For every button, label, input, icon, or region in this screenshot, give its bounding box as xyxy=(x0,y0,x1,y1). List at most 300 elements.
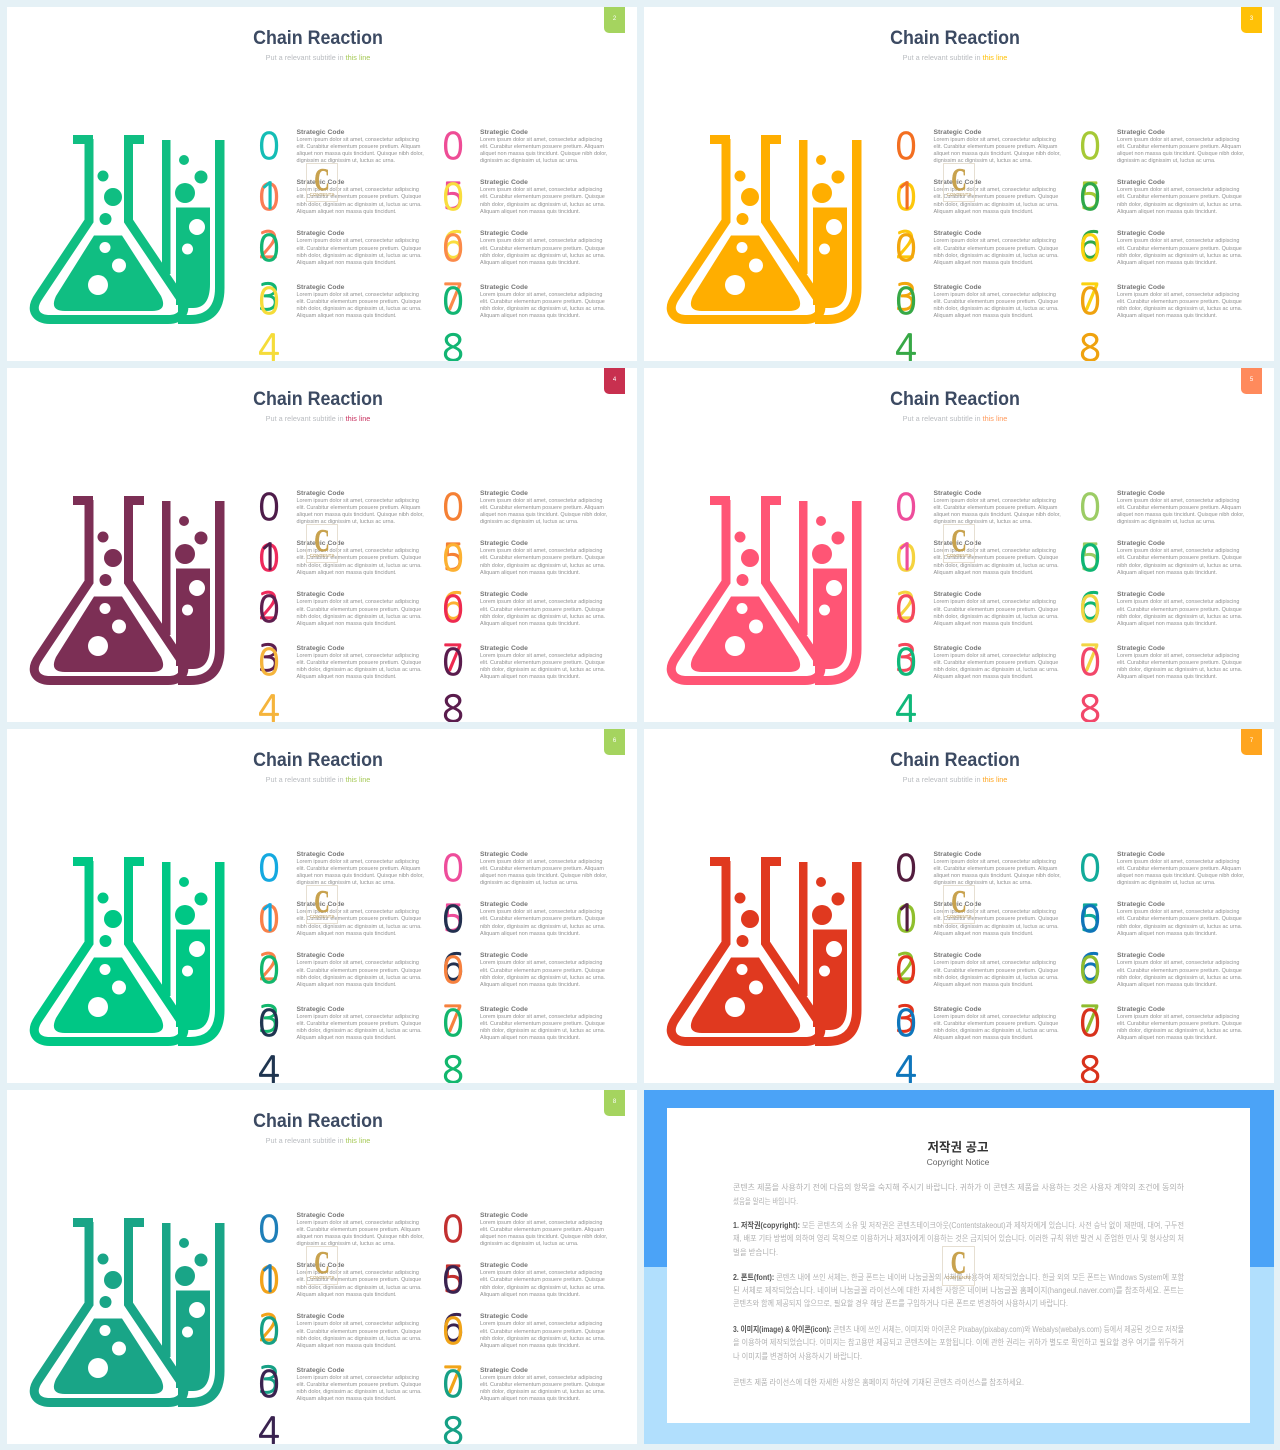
text block xyxy=(934,490,1061,527)
text block: nibh dolor, dignissim ac dignissim ut, luctus ac urna. xyxy=(934,924,1059,930)
numerals right column: 6 xyxy=(1079,228,1101,264)
page tag xyxy=(604,1090,625,1116)
text block: elit. Curabitur elementum posuere pretium. Quisque xyxy=(480,246,605,252)
text block: elit. Curabitur elementum posuere pretium. Aliquam xyxy=(1117,505,1241,511)
text block xyxy=(934,645,1059,682)
notice intro: 콘텐츠 제품을 사용하기 전에 다음의 항목을 숙지해 주시기 바랍니다. 귀하가 이 콘텐츠 제품을 사용하는 것은 사용자 계약의 조건에 동의하 xyxy=(733,1182,1185,1192)
text block xyxy=(296,1367,422,1404)
text block: dignissim ac dignissim ut, luctus ac urna. xyxy=(480,880,579,886)
text block xyxy=(1117,129,1244,164)
numerals left column: 2 xyxy=(258,950,279,986)
section 1 copyright: 재, 배포 기타 방법에 의하여 영리 목적으로 이용하거나 제3자에게 이용하는 것은 금지되어 있습니다. 이러한 규칙 위반 발견 시 준엄한 민사 및 형사상의 처 xyxy=(733,1233,1184,1243)
numerals left column: 3 xyxy=(258,1363,279,1399)
text block: nibh dolor, dignissim ac dignissim ut, luctus ac urna. xyxy=(480,306,605,312)
text block: Strategic Code xyxy=(480,1367,528,1374)
text block: elit. Curabitur elementum posuere pretium. Quisque xyxy=(934,246,1058,252)
text block: Strategic Code xyxy=(296,1212,344,1219)
numerals left column: 0 xyxy=(258,180,279,216)
text block: aliquet non massa quis tincidunt. Quisque nibh dolor, xyxy=(934,873,1061,879)
text block: Strategic Code xyxy=(1117,230,1165,237)
text block: nibh dolor, dignissim ac dignissim ut, luctus ac urna. xyxy=(296,1389,422,1395)
numerals right column: 0 xyxy=(442,902,464,938)
text block: elit. Curabitur elementum posuere pretium. Quisque xyxy=(296,968,421,974)
title: Chain Reaction xyxy=(253,1110,383,1132)
text block: nibh dolor, dignissim ac dignissim ut, luctus ac urna. xyxy=(934,202,1059,208)
text block: Aliquam aliquet non massa quis tincidunt. xyxy=(1117,931,1217,937)
text block: nibh dolor, dignissim ac dignissim ut, luctus ac urna. xyxy=(296,614,422,620)
text block: Strategic Code xyxy=(480,952,528,959)
numerals right column: 0 xyxy=(442,1367,464,1403)
numerals left column xyxy=(895,490,916,722)
text block: aliquet non massa quis tincidunt. Quisque nibh dolor, xyxy=(480,873,607,879)
title: Chain Reaction xyxy=(253,388,383,410)
numerals right column: 0 xyxy=(1079,851,1101,887)
watermark: CONTENTS xyxy=(310,192,334,197)
text block: Strategic Code xyxy=(1117,284,1165,291)
text block: Strategic Code xyxy=(1117,1006,1165,1013)
text block: Strategic Code xyxy=(296,952,344,959)
text block xyxy=(1117,645,1242,682)
numerals right column: 0 xyxy=(442,1212,464,1248)
text block xyxy=(296,230,422,266)
text block: Aliquam aliquet non massa quis tincidunt. xyxy=(934,674,1034,680)
text block xyxy=(480,230,605,266)
numerals left column: 0 xyxy=(895,490,916,526)
text block xyxy=(934,901,1059,938)
text block: Strategic Code xyxy=(1117,179,1165,186)
numerals left column: 0 xyxy=(895,129,916,165)
text block: Aliquam aliquet non massa quis tincidunt. xyxy=(1117,260,1217,266)
numerals left column: 0 xyxy=(895,645,916,681)
text block xyxy=(480,901,605,938)
text block xyxy=(480,952,605,989)
text block: Aliquam aliquet non massa quis tincidunt. xyxy=(480,1396,580,1402)
text block: nibh dolor, dignissim ac dignissim ut, luctus ac urna. xyxy=(480,202,605,208)
text block: Lorem ipsum dolor sit amet, consectetur adipiscing xyxy=(1117,137,1239,143)
numerals left column: 0 xyxy=(258,490,279,526)
numerals right column: 5 xyxy=(442,1262,464,1298)
numerals left column: 0 xyxy=(258,1314,279,1350)
watermark xyxy=(306,1246,338,1285)
text block: Strategic Code xyxy=(934,851,981,858)
text block: elit. Curabitur elementum posuere pretium. Quisque xyxy=(1117,299,1242,305)
text block: Lorem ipsum dolor sit amet, consectetur adipiscing xyxy=(480,859,602,865)
text block: nibh dolor, dignissim ac dignissim ut, luctus ac urna. xyxy=(934,306,1059,312)
text block: nibh dolor, dignissim ac dignissim ut, luctus ac urna. xyxy=(296,202,422,208)
watermark xyxy=(943,163,975,202)
text block: Aliquam aliquet non massa quis tincidunt. xyxy=(296,313,397,319)
numerals left column xyxy=(254,1090,283,1444)
text block: aliquet non massa quis tincidunt. Quisque nibh dolor, xyxy=(480,1234,607,1240)
title: Chain Reaction xyxy=(890,27,1020,49)
text block: elit. Curabitur elementum posuere pretium. Quisque xyxy=(296,1021,421,1027)
text block xyxy=(934,952,1059,989)
notice subtitle: Copyright Notice xyxy=(927,1157,990,1167)
text block: Lorem ipsum dolor sit amet, consectetur adipiscing xyxy=(296,1014,419,1020)
text block xyxy=(480,1262,605,1299)
watermark: CONTENTS xyxy=(947,553,971,558)
numerals left column: 0 xyxy=(895,231,916,267)
text block: Strategic Code xyxy=(934,591,981,598)
text block xyxy=(934,129,1061,164)
text block: elit. Curabitur elementum posuere pretium. Quisque xyxy=(296,660,421,666)
text block: elit. Curabitur elementum posuere pretium. Quisque xyxy=(480,555,605,561)
text block xyxy=(934,591,1059,628)
numerals right column: 5 xyxy=(442,540,464,576)
text block: Strategic Code xyxy=(296,1313,344,1320)
text block: aliquet non massa quis tincidunt. Quisque nibh dolor, xyxy=(480,151,607,157)
text block: Aliquam aliquet non massa quis tincidunt. xyxy=(296,621,397,627)
numerals left column: 0 xyxy=(258,645,279,681)
text block: nibh dolor, dignissim ac dignissim ut, luctus ac urna. xyxy=(296,1028,422,1034)
text block: Aliquam aliquet non massa quis tincidunt. xyxy=(480,1292,580,1298)
text block: Aliquam aliquet non massa quis tincidunt. xyxy=(296,570,397,576)
text block: Aliquam aliquet non massa quis tincidunt. xyxy=(934,260,1034,266)
text block: nibh dolor, dignissim ac dignissim ut, luctus ac urna. xyxy=(934,562,1059,568)
text block: Lorem ipsum dolor sit amet, consectetur adipiscing xyxy=(296,909,419,915)
panel: slide 8 teal xyxy=(7,1090,637,1444)
text block: nibh dolor, dignissim ac dignissim ut, luctus ac urna. xyxy=(296,667,422,673)
text block: Aliquam aliquet non massa quis tincidunt. xyxy=(480,931,580,937)
watermark xyxy=(306,163,338,202)
numerals right column: 0 xyxy=(1079,1006,1101,1042)
numerals right column xyxy=(442,490,464,722)
numerals left column: 2 xyxy=(895,228,916,264)
text block: nibh dolor, dignissim ac dignissim ut, luctus ac urna. xyxy=(296,253,422,259)
text block: Strategic Code xyxy=(296,1367,344,1374)
text block: elit. Curabitur elementum posuere pretium. Quisque xyxy=(480,607,605,613)
text block: elit. Curabitur elementum posuere pretium. Quisque xyxy=(296,299,421,305)
text block: Aliquam aliquet non massa quis tincidunt. xyxy=(480,621,580,627)
text block: elit. Curabitur elementum posuere pretium. Quisque xyxy=(480,1382,605,1388)
text block: elit. Curabitur elementum posuere pretium. Quisque xyxy=(1117,1021,1242,1027)
panel: slide 7 red xyxy=(644,729,1274,1083)
section 3 image and icon: 나 이미지를 변경하여 사용하시기 바랍니다. xyxy=(733,1351,862,1361)
text block: Lorem ipsum dolor sit amet, consectetur adipiscing xyxy=(480,1270,602,1276)
text block: dignissim ac dignissim ut, luctus ac urna. xyxy=(934,880,1032,886)
text block xyxy=(934,284,1059,319)
text block: elit. Curabitur elementum posuere pretium. Quisque xyxy=(296,246,421,252)
icon: flask and test tube xyxy=(666,496,862,685)
numerals left column: 3 xyxy=(258,1002,279,1038)
text block: nibh dolor, dignissim ac dignissim ut, luctus ac urna. xyxy=(480,614,605,620)
numerals right column: 0 xyxy=(1079,902,1101,938)
text block: elit. Curabitur elementum posuere pretium. Quisque xyxy=(934,299,1058,305)
text block xyxy=(480,490,607,525)
text block: nibh dolor, dignissim ac dignissim ut, luctus ac urna. xyxy=(480,1336,605,1342)
numerals left column: 1 xyxy=(258,901,279,937)
text block: Strategic Code xyxy=(480,591,528,598)
numerals left column: 0 xyxy=(258,902,279,938)
text block xyxy=(296,901,422,938)
text block: aliquet non massa quis tincidunt. Quisque nibh dolor, xyxy=(480,512,607,518)
panel: copyright notice xyxy=(644,1090,1274,1444)
section 1 copyright: 1. 저작권(copyright): 모든 콘텐츠의 소유 및 저작권은 콘텐츠테이크아웃(Contentstakeout)과 제작자에게 있습니다. 사전 승낙 없이 재판매, 대여, 구두전 xyxy=(733,1220,1184,1230)
text block: Aliquam aliquet non massa quis tincidunt. xyxy=(480,570,580,576)
text block: elit. Curabitur elementum posuere pretium. Quisque xyxy=(296,194,421,200)
panel: slide 4 plum xyxy=(7,368,637,722)
text block: nibh dolor, dignissim ac dignissim ut, luctus ac urna. xyxy=(1117,614,1242,620)
text block xyxy=(1117,851,1244,888)
text block: Strategic Code xyxy=(296,540,344,547)
text block: dignissim ac dignissim ut, luctus ac urna. xyxy=(296,880,395,886)
text block: Strategic Code xyxy=(480,179,528,186)
numerals left column: 0 xyxy=(258,953,279,989)
text block: Strategic Code xyxy=(296,901,344,908)
text block: elit. Curabitur elementum posuere pretium. Quisque xyxy=(480,194,605,200)
text block: Strategic Code xyxy=(1117,645,1165,652)
text block: Lorem ipsum dolor sit amet, consectetur adipiscing xyxy=(1117,1014,1239,1020)
numerals left column xyxy=(254,729,283,1083)
text block xyxy=(480,591,605,627)
text block xyxy=(480,1367,605,1404)
text block xyxy=(296,284,422,319)
text block: elit. Curabitur elementum posuere pretium. Quisque xyxy=(296,1277,421,1283)
text block: elit. Curabitur elementum posuere pretium. Quisque xyxy=(480,660,605,666)
text block: elit. Curabitur elementum posuere pretium. Aliquam xyxy=(296,866,420,872)
text block: elit. Curabitur elementum posuere pretium. Quisque xyxy=(934,660,1058,666)
text block: nibh dolor, dignissim ac dignissim ut, luctus ac urna. xyxy=(480,667,605,673)
text block: Lorem ipsum dolor sit amet, consectetur adipiscing xyxy=(480,1321,602,1327)
text block xyxy=(296,129,424,164)
text block: aliquet non massa quis tincidunt. Quisque nibh dolor, xyxy=(1117,512,1244,518)
text block: elit. Curabitur elementum posuere pretium. Aliquam xyxy=(934,505,1057,511)
text block xyxy=(480,540,605,576)
text block: nibh dolor, dignissim ac dignissim ut, luctus ac urna. xyxy=(296,1336,422,1342)
text block: Strategic Code xyxy=(480,540,528,547)
numerals left column: 1 xyxy=(895,179,916,215)
text block: nibh dolor, dignissim ac dignissim ut, luctus ac urna. xyxy=(934,253,1059,259)
text block: Lorem ipsum dolor sit amet, consectetur adipiscing xyxy=(934,1014,1056,1020)
page tag xyxy=(1241,729,1262,755)
text block: Lorem ipsum dolor sit amet, consectetur adipiscing xyxy=(296,1220,419,1226)
text block: Lorem ipsum dolor sit amet, consectetur adipiscing xyxy=(1117,187,1239,193)
text block: dignissim ac dignissim ut, luctus ac urna. xyxy=(480,1241,579,1247)
text block: Lorem ipsum dolor sit amet, consectetur adipiscing xyxy=(296,137,419,143)
text block: elit. Curabitur elementum posuere pretium. Quisque xyxy=(480,916,605,922)
notice intro xyxy=(733,1182,1185,1206)
text block: Aliquam aliquet non massa quis tincidunt. xyxy=(934,982,1034,988)
text block: Strategic Code xyxy=(934,490,981,497)
text block: Aliquam aliquet non massa quis tincidunt. xyxy=(480,1343,580,1349)
page tag: 4 xyxy=(613,377,616,383)
numerals right column xyxy=(1079,129,1101,361)
text block xyxy=(480,284,605,319)
text block: Lorem ipsum dolor sit amet, consectetur adipiscing xyxy=(480,238,602,244)
numerals right column: 0 xyxy=(442,284,464,320)
numerals right column: 0 xyxy=(1079,490,1101,526)
text block: Lorem ipsum dolor sit amet, consectetur adipiscing xyxy=(480,137,602,143)
text block: nibh dolor, dignissim ac dignissim ut, luctus ac urna. xyxy=(480,1284,605,1290)
text block xyxy=(480,129,607,164)
text block xyxy=(934,540,1059,577)
text block: Aliquam aliquet non massa quis tincidunt. xyxy=(1117,982,1217,988)
text block: Aliquam aliquet non massa quis tincidunt. xyxy=(480,313,580,319)
text block: Strategic Code xyxy=(1117,591,1165,598)
numerals left column: 0 xyxy=(258,592,279,628)
text block: Lorem ipsum dolor sit amet, consectetur adipiscing xyxy=(934,187,1056,193)
text block: elit. Curabitur elementum posuere pretium. Quisque xyxy=(934,194,1058,200)
title: Chain Reaction xyxy=(253,749,383,771)
text block: Aliquam aliquet non massa quis tincidunt. xyxy=(934,313,1034,319)
text block: nibh dolor, dignissim ac dignissim ut, luctus ac urna. xyxy=(934,667,1059,673)
numerals right column: 6 xyxy=(1079,589,1101,625)
panel: slide 6 emerald xyxy=(7,729,637,1083)
text block: nibh dolor, dignissim ac dignissim ut, luctus ac urna. xyxy=(296,1284,422,1290)
text block xyxy=(480,179,605,215)
text block: Strategic Code xyxy=(480,851,528,858)
text block: Aliquam aliquet non massa quis tincidunt. xyxy=(480,674,580,680)
text block xyxy=(1117,901,1242,938)
watermark xyxy=(306,885,338,924)
text block: nibh dolor, dignissim ac dignissim ut, luctus ac urna. xyxy=(480,562,605,568)
numerals left column: 0 xyxy=(895,284,916,320)
icon: flask and test tube xyxy=(25,852,230,1052)
title: Chain Reaction xyxy=(890,388,1020,410)
watermark: CONTENTS xyxy=(310,553,334,558)
numerals right column: 0 xyxy=(442,953,464,989)
text block: Strategic Code xyxy=(296,851,344,858)
text block: Strategic Code xyxy=(934,645,981,652)
numerals left column: 1 xyxy=(895,901,916,937)
numerals right column: 5 xyxy=(442,179,464,215)
text block: aliquet non massa quis tincidunt. Quisque nibh dolor, xyxy=(934,151,1061,157)
text block: elit. Curabitur elementum posuere pretium. Aliquam xyxy=(480,144,604,150)
page tag xyxy=(604,729,625,755)
text block: Strategic Code xyxy=(480,901,528,908)
text block: Aliquam aliquet non massa quis tincidunt. xyxy=(1117,209,1217,215)
text block: Lorem ipsum dolor sit amet, consectetur adipiscing xyxy=(480,187,602,193)
numerals right column: 7 xyxy=(442,641,464,677)
text block: Aliquam aliquet non massa quis tincidunt. xyxy=(296,1396,397,1402)
text block: Lorem ipsum dolor sit amet, consectetur adipiscing xyxy=(1117,909,1239,915)
text block: Lorem ipsum dolor sit amet, consectetur adipiscing xyxy=(296,1270,419,1276)
text block: Lorem ipsum dolor sit amet, consectetur adipiscing xyxy=(296,960,419,966)
numerals right column: 7 xyxy=(442,280,464,316)
numerals right column: 0 xyxy=(1079,645,1101,681)
numerals right column: 0 xyxy=(1079,284,1101,320)
subtitle: Put a relevant subtitle in this line xyxy=(266,414,370,423)
numerals left column: 1 xyxy=(258,540,279,576)
text block: elit. Curabitur elementum posuere pretium. Quisque xyxy=(1117,607,1242,613)
text block: Lorem ipsum dolor sit amet, consectetur adipiscing xyxy=(1117,498,1239,504)
text block xyxy=(296,540,422,576)
notice title: 저작권 공고 xyxy=(928,1140,988,1154)
text block: Lorem ipsum dolor sit amet, consectetur adipiscing xyxy=(480,960,602,966)
text block: Lorem ipsum dolor sit amet, consectetur adipiscing xyxy=(1117,960,1239,966)
text block: aliquet non massa quis tincidunt. Quisque nibh dolor, xyxy=(296,151,424,157)
numerals left column xyxy=(258,129,279,361)
text block: Lorem ipsum dolor sit amet, consectetur adipiscing xyxy=(1117,653,1239,659)
text block: Strategic Code xyxy=(480,1262,528,1269)
text block: Strategic Code xyxy=(1117,901,1165,908)
text block: elit. Curabitur elementum posuere pretium. Quisque xyxy=(934,916,1058,922)
text block: Strategic Code xyxy=(1117,490,1165,497)
text block: elit. Curabitur elementum posuere pretium. Quisque xyxy=(480,1329,605,1335)
text block: elit. Curabitur elementum posuere pretium. Quisque xyxy=(296,1382,421,1388)
text block xyxy=(1117,230,1242,266)
text block: elit. Curabitur elementum posuere pretium. Quisque xyxy=(296,916,421,922)
text block: nibh dolor, dignissim ac dignissim ut, luctus ac urna. xyxy=(1117,253,1242,259)
text block: elit. Curabitur elementum posuere pretium. Quisque xyxy=(480,299,605,305)
text block: Lorem ipsum dolor sit amet, consectetur adipiscing xyxy=(480,548,602,554)
numerals right column: 0 xyxy=(442,541,464,577)
text block xyxy=(296,1212,424,1249)
page tag: 2 xyxy=(613,16,616,22)
text block xyxy=(480,1212,607,1249)
text block xyxy=(296,1313,422,1350)
text block: aliquet non massa quis tincidunt. Quisque nibh dolor, xyxy=(296,873,424,879)
numerals left column: 0 xyxy=(258,1006,279,1042)
text block: Strategic Code xyxy=(934,179,981,186)
text block xyxy=(480,1313,605,1350)
text block: Strategic Code xyxy=(480,1212,528,1219)
numerals right column: 5 xyxy=(1079,179,1101,215)
text block: Strategic Code xyxy=(480,129,528,136)
numerals left column: 1 xyxy=(258,1262,279,1298)
text block: Strategic Code xyxy=(296,490,344,497)
text block: Lorem ipsum dolor sit amet, consectetur adipiscing xyxy=(934,238,1056,244)
text block: Strategic Code xyxy=(296,645,344,652)
text block: Strategic Code xyxy=(296,230,344,237)
text block: Aliquam aliquet non massa quis tincidunt. xyxy=(296,674,397,680)
numerals right column xyxy=(1075,729,1105,1083)
numerals left column: 0 xyxy=(258,129,279,165)
icon: flask and test tube xyxy=(25,1213,230,1413)
text block: Lorem ipsum dolor sit amet, consectetur adipiscing xyxy=(934,548,1056,554)
text block: aliquet non massa quis tincidunt. Quisque nibh dolor, xyxy=(296,512,424,518)
text block xyxy=(934,1006,1059,1043)
text block: Lorem ipsum dolor sit amet, consectetur adipiscing xyxy=(934,292,1056,298)
text block: Aliquam aliquet non massa quis tincidunt. xyxy=(480,260,580,266)
numerals left column: 0 xyxy=(258,1263,279,1299)
text block: elit. Curabitur elementum posuere pretium. Quisque xyxy=(1117,194,1242,200)
text block: Lorem ipsum dolor sit amet, consectetur adipiscing xyxy=(480,599,602,605)
subtitle: Put a relevant subtitle in this line xyxy=(266,1136,370,1145)
text block: Strategic Code xyxy=(480,230,528,237)
text block: Strategic Code xyxy=(934,230,981,237)
watermark xyxy=(306,524,338,563)
page tag: 7 xyxy=(1250,738,1253,744)
numerals left column: 0 xyxy=(258,851,279,887)
text block xyxy=(296,1006,422,1043)
text block xyxy=(934,851,1061,888)
page tag xyxy=(1241,368,1262,394)
text block: Lorem ipsum dolor sit amet, consectetur adipiscing xyxy=(1117,238,1239,244)
title: Chain Reaction xyxy=(890,749,1020,771)
text block: Aliquam aliquet non massa quis tincidunt. xyxy=(1117,313,1217,319)
numerals right column: 0 xyxy=(1079,541,1101,577)
text block: elit. Curabitur elementum posuere pretium. Quisque xyxy=(296,1329,421,1335)
text block: elit. Curabitur elementum posuere pretium. Quisque xyxy=(1117,916,1242,922)
text block: dignissim ac dignissim ut, luctus ac urna. xyxy=(296,519,395,525)
text block: Aliquam aliquet non massa quis tincidunt. xyxy=(1117,621,1217,627)
numerals right column: 5 xyxy=(442,901,464,937)
text block: nibh dolor, dignissim ac dignissim ut, luctus ac urna. xyxy=(480,253,605,259)
section 3 image and icon xyxy=(733,1324,1184,1361)
text block: elit. Curabitur elementum posuere pretium. Aliquam xyxy=(296,144,420,150)
text block: Strategic Code xyxy=(934,952,981,959)
text block: Strategic Code xyxy=(296,284,344,291)
text block: elit. Curabitur elementum posuere pretium. Quisque xyxy=(1117,660,1242,666)
text block xyxy=(296,179,422,215)
text block: Aliquam aliquet non massa quis tincidunt. xyxy=(296,1343,397,1349)
text block: Lorem ipsum dolor sit amet, consectetur adipiscing xyxy=(934,599,1056,605)
text block xyxy=(296,591,422,627)
text block: Aliquam aliquet non massa quis tincidunt. xyxy=(296,209,397,215)
text block: Strategic Code xyxy=(934,1006,981,1013)
text block: Strategic Code xyxy=(296,179,344,186)
